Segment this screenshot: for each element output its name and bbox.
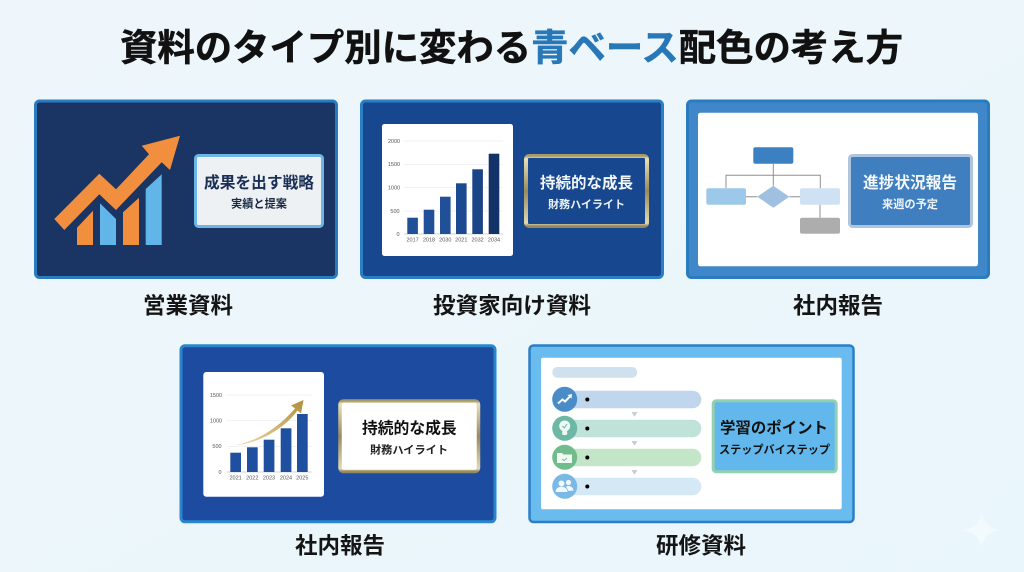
callout: progress report: 来週の予定 <box>882 197 938 211</box>
icon: sparkle watermark <box>964 512 999 548</box>
callout: learning points: 学習のポイント <box>720 418 828 437</box>
bar chart: 2017 to 2034: 2017 <box>406 238 419 244</box>
bar chart: 2017 to 2034: 0 <box>396 232 400 238</box>
bar chart: 2021 to 2025: 2023 <box>263 476 275 482</box>
bar chart: 2017 to 2034: 2030 <box>439 238 451 244</box>
icon: trend line <box>552 387 577 412</box>
label: sales material: 営業資料 <box>143 294 233 318</box>
bar chart: 2017 to 2034: 2018 <box>423 238 435 244</box>
callout: progress report <box>850 156 972 226</box>
bar chart: 2017 to 2034: 1500 <box>388 162 400 168</box>
bar chart: 2021 to 2025: 0 <box>218 470 222 476</box>
label: training material: 研修資料 <box>656 534 746 558</box>
icon: gold growth arrow <box>234 400 304 446</box>
panel: internal report <box>688 101 988 278</box>
callout: sustained growth: 財務ハイライト <box>370 442 448 456</box>
label: internal report: 社内報告 <box>793 294 883 318</box>
bar chart: 2017 to 2034: 2032 <box>471 238 484 244</box>
flowchart <box>706 147 840 234</box>
bar chart: 2017 to 2034: 1000 <box>388 186 400 192</box>
callout: sustained growth <box>340 401 478 472</box>
callout: sustained growth: 財務ハイライト <box>548 197 625 211</box>
icon: folder <box>552 445 577 470</box>
title: 資料のタイプ別に変わる青ベース配色の考え方 <box>120 28 903 68</box>
bar chart: 2017 to 2034: 500 <box>390 209 400 215</box>
bar chart: 2021 to 2025 <box>203 372 324 497</box>
panel: training material <box>530 346 854 522</box>
callout: sustained growth <box>526 156 647 226</box>
bar chart: 2021 to 2025: 1000 <box>210 419 222 425</box>
step list <box>552 387 701 499</box>
bar chart: 2021 to 2025: 500 <box>212 444 222 450</box>
bar chart: 2021 to 2025: 1500 <box>210 393 222 399</box>
bar chart: 2021 to 2025: 2022 <box>246 476 258 482</box>
bar chart: 2017 to 2034: 2021 <box>455 238 467 244</box>
callout: sales strategy: 実績と提案 <box>231 196 287 210</box>
callout: learning points: ステップバイステップ <box>719 444 830 456</box>
label: internal report: 社内報告 <box>295 534 385 558</box>
bar chart: 2017 to 2034: 2034 <box>488 238 500 244</box>
callout: progress report: 進捗状況報告 <box>863 174 957 192</box>
icon: light bulb <box>552 416 577 441</box>
label: investor material: 投資家向け資料 <box>433 294 591 318</box>
icon: rising bars and orange arrow <box>54 136 180 245</box>
panel: internal report, financial highlights <box>181 346 495 522</box>
panel: investor material <box>362 101 662 278</box>
callout: sustained growth: 持続的な成長 <box>540 173 633 192</box>
panel: sales material <box>36 101 336 278</box>
callout: learning points <box>713 401 836 472</box>
icon: people <box>552 474 577 499</box>
callout: sales strategy: 成果を出す戦略 <box>204 173 314 192</box>
bar chart: 2021 to 2025: 2024 <box>280 476 292 482</box>
bar chart: 2021 to 2025: 2025 <box>296 476 308 482</box>
bar chart: 2017 to 2034 <box>382 124 513 256</box>
bar chart: 2021 to 2025: 2021 <box>229 476 242 482</box>
heading placeholder pill <box>552 367 637 378</box>
callout: sustained growth: 持続的な成長 <box>362 419 457 438</box>
bar chart: 2017 to 2034: 2000 <box>388 139 400 145</box>
callout: sales strategy <box>196 156 322 226</box>
